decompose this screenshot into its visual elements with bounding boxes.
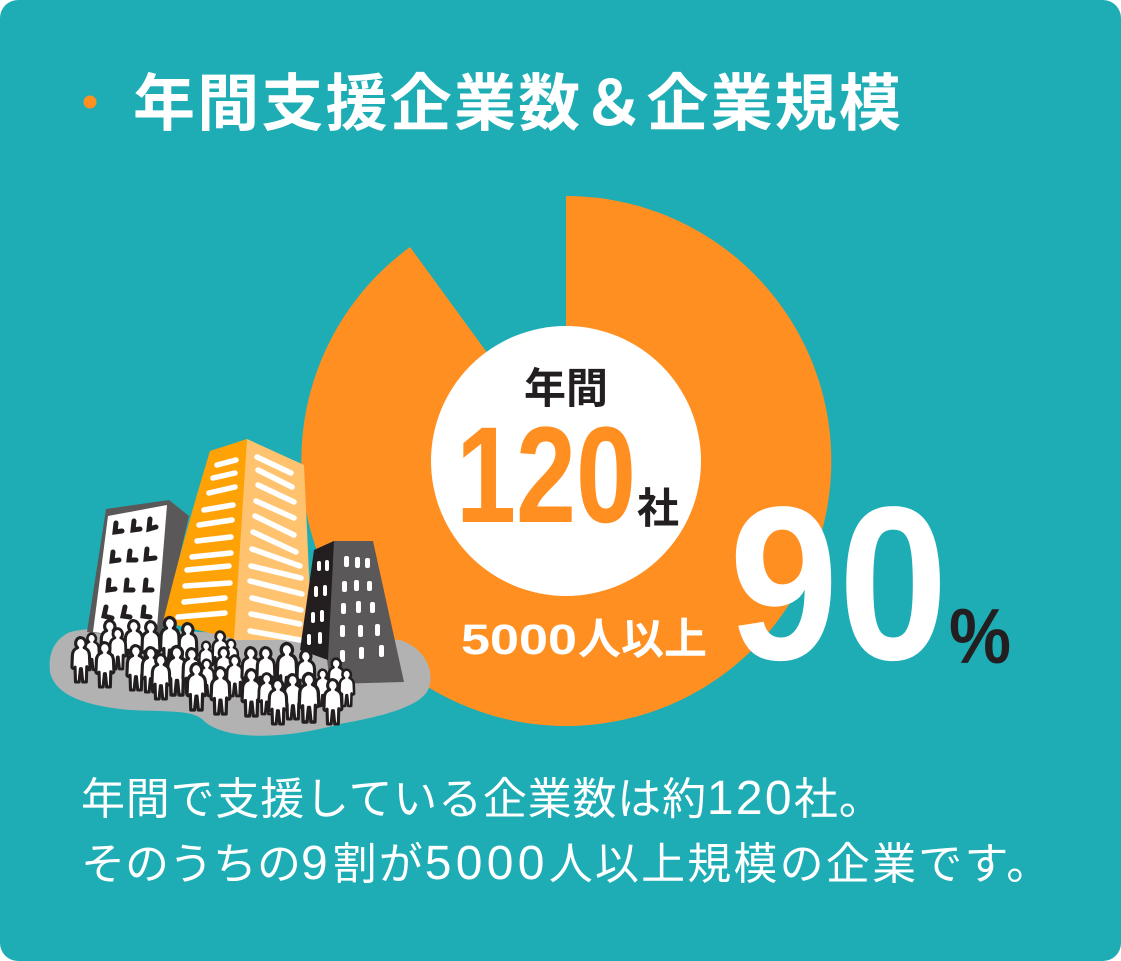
center unit: 社: 社 xyxy=(637,485,679,532)
percent sign: % xyxy=(949,592,1011,680)
building: white office xyxy=(87,500,189,640)
illustration: buildings and crowd xyxy=(50,439,431,736)
segment label: 5000人以上: 5000 xyxy=(461,616,577,664)
segment label: 5000人以上 xyxy=(461,616,707,664)
crowd of people xyxy=(72,617,354,724)
ground shadow xyxy=(50,628,431,736)
building: dark tower xyxy=(300,541,404,684)
building: orange tower xyxy=(163,439,312,640)
title: 年間支援企業数＆企業規模 xyxy=(133,53,901,143)
center label: 年間: 年間 xyxy=(524,365,608,412)
description line 1: 年間で支援している企業数は約120社。 xyxy=(81,772,884,825)
donut chart: 90 percent xyxy=(301,196,831,726)
description line 2: そのうちの9割が5000人以上規模の企業です。 xyxy=(81,837,1052,890)
title bullet xyxy=(84,96,96,108)
big number: 90: 90 xyxy=(729,462,948,706)
center number: 120: 120 xyxy=(456,399,636,552)
segment label: 5000人以上: 人以上 xyxy=(578,616,707,664)
